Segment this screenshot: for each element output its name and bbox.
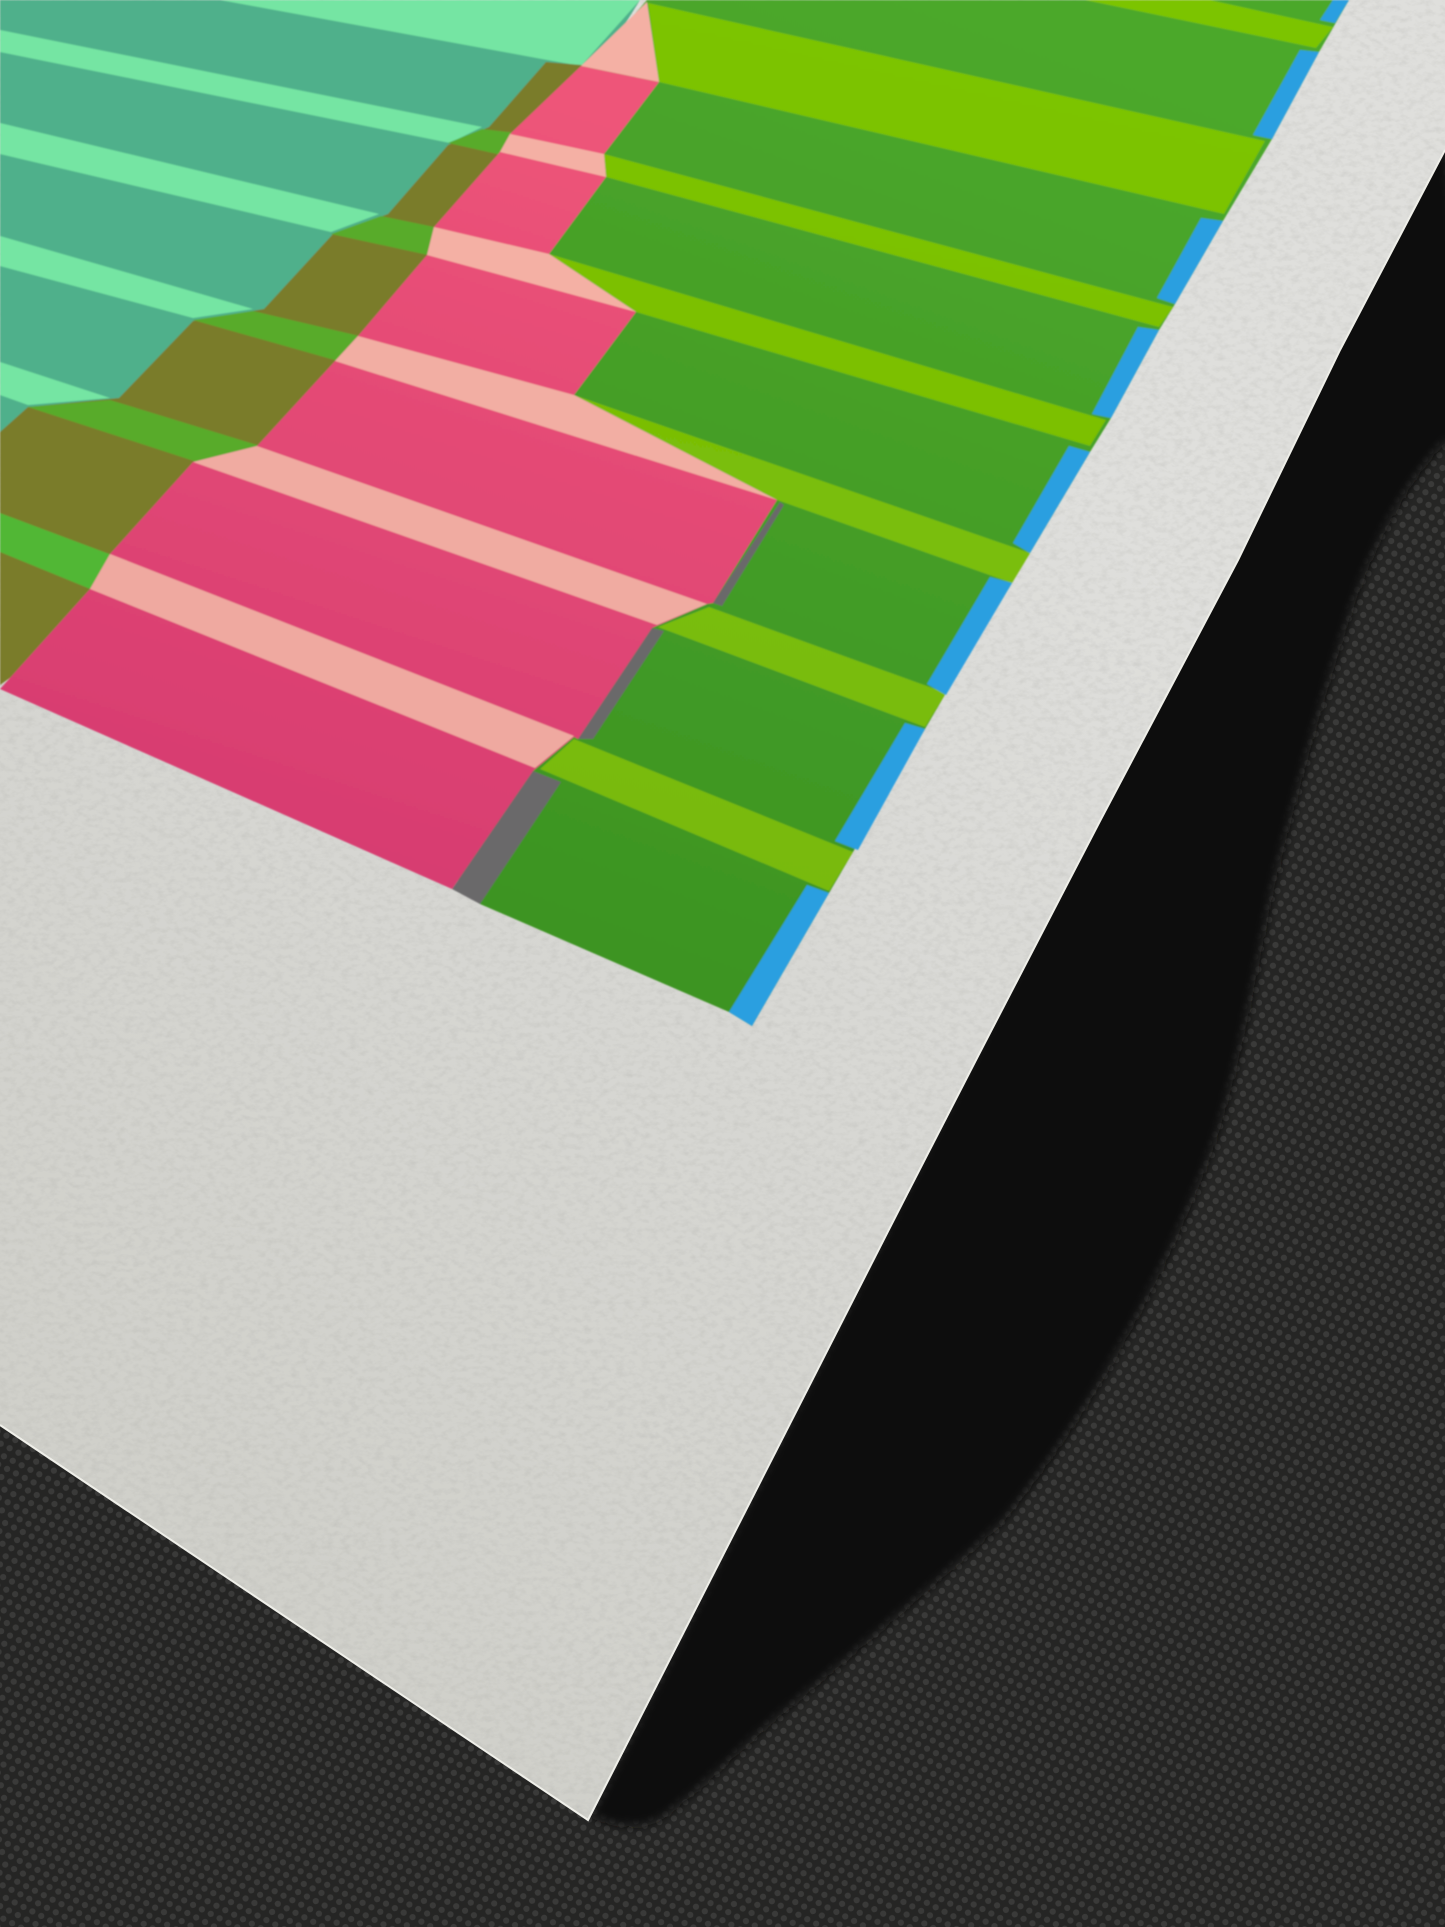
- teal stripe top block: [220, 0, 640, 66]
- lime stripe a: [1085, 0, 1333, 48]
- panel: pink column: [0, 2, 777, 889]
- blue segment b: [1253, 50, 1319, 139]
- printed artwork: [0, 0, 1349, 1026]
- peach stripe b: [500, 134, 606, 177]
- panel: blue edge segments: [729, 0, 1349, 1026]
- lime stripe d: [549, 254, 1106, 446]
- panel: green column: [440, 0, 1349, 1026]
- blue segment a: [1320, 0, 1349, 23]
- lime stripe b: [648, 3, 1265, 214]
- blue segment f: [927, 577, 1012, 695]
- peach stripe f: [90, 554, 574, 768]
- panel: lime stripes: [540, 0, 1333, 891]
- grey sliver upper: [713, 502, 784, 606]
- panel: teal field: [0, 0, 640, 440]
- blue segment h: [729, 885, 829, 1026]
- peach top tip: [581, 2, 659, 82]
- panel: grey slivers: [452, 502, 784, 904]
- teal stripe 1: [0, 30, 482, 143]
- lime stripe f: [658, 607, 946, 727]
- olive overlap stripe 1: [448, 129, 526, 156]
- lime stripe g: [540, 739, 853, 891]
- blue segment c: [1157, 218, 1223, 304]
- teal stripe 3: [0, 236, 253, 318]
- teal stripe 2: [0, 123, 379, 232]
- lime stripe e: [574, 395, 1030, 583]
- olive overlap stripe 2: [331, 216, 444, 257]
- blue segment d: [1092, 327, 1159, 418]
- olive overlap stripe 3: [193, 311, 368, 363]
- peach stripe d: [335, 336, 777, 500]
- cast shadow of the paper: [590, 120, 1445, 1826]
- blue segment e: [1013, 446, 1090, 553]
- grey sliver lower: [452, 771, 561, 904]
- grey sliver middle: [578, 628, 664, 739]
- teal stripe 4: [0, 362, 110, 405]
- olive overlap stripe 5: [0, 513, 120, 593]
- peach stripe c: [427, 227, 636, 312]
- panel: olive column: [0, 62, 640, 685]
- lime stripe c: [604, 154, 1173, 327]
- olive overlap stripe 4: [28, 400, 267, 464]
- blue segment g: [835, 723, 925, 850]
- peach stripe e: [193, 446, 707, 625]
